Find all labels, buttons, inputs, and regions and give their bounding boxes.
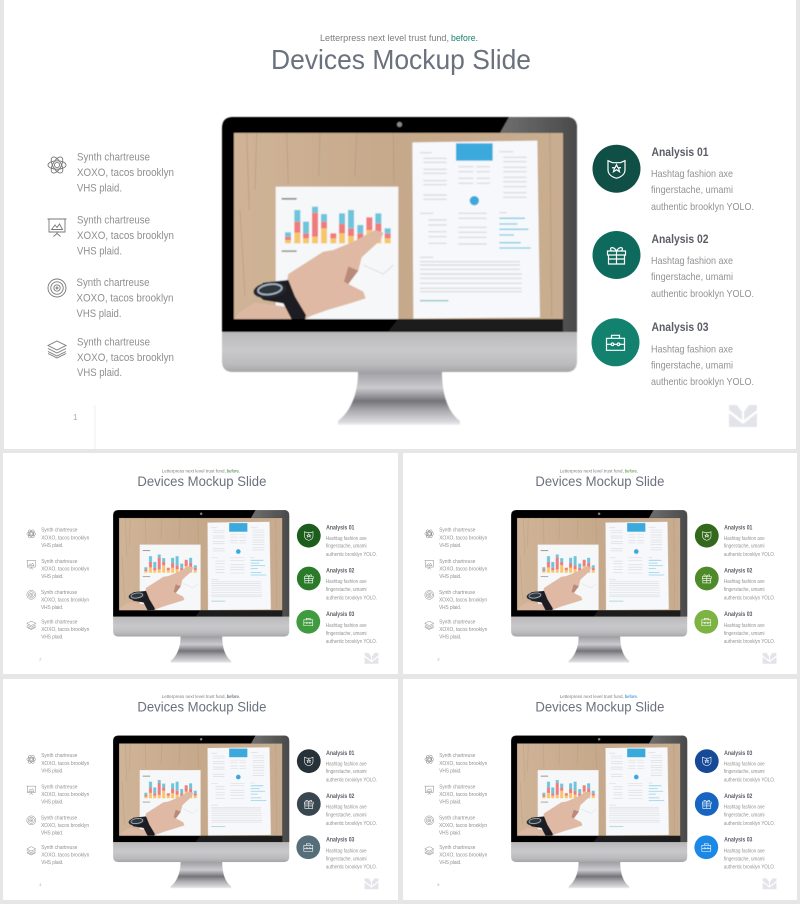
feature text 3: Synth chartreuse — [76, 277, 150, 289]
analysis 02: Hashtag fashion axe — [651, 255, 733, 267]
left feature list: VHS plaid. — [439, 543, 462, 549]
left feature list — [48, 152, 174, 379]
analysis list: authentic brooklyn YOLO. — [326, 552, 377, 558]
left feature list: Synth chartreuse — [439, 784, 475, 790]
left feature list: Synth chartreuse — [41, 753, 77, 759]
analysis list: fingerstache, umami — [724, 544, 765, 550]
left feature list: Synth chartreuse — [439, 619, 475, 625]
left feature list: VHS plaid. — [41, 634, 64, 640]
left feature list: Synth chartreuse — [41, 528, 77, 534]
feature text 4: VHS plaid. — [77, 367, 122, 379]
analysis list: authentic brooklyn YOLO. — [326, 639, 377, 645]
subtitle: before. — [451, 33, 478, 44]
left feature list: XOXO, tacos brooklyn — [41, 535, 89, 541]
panel: slide 5 blue — [403, 679, 797, 900]
left feature list: XOXO, tacos brooklyn — [41, 823, 89, 829]
left feature list — [425, 528, 487, 640]
feature text 1: Synth chartreuse — [77, 152, 150, 164]
left feature list — [27, 528, 89, 640]
left feature list: XOXO, tacos brooklyn — [41, 761, 89, 767]
left feature list: XOXO, tacos brooklyn — [41, 627, 89, 633]
analysis list: authentic brooklyn YOLO. — [724, 639, 775, 645]
analysis list: fingerstache, umami — [724, 812, 765, 818]
left feature list: VHS plaid. — [41, 860, 64, 866]
left feature list: XOXO, tacos brooklyn — [41, 853, 89, 859]
analysis list: Analysis 02 — [724, 569, 753, 575]
analysis 02: authentic brooklyn YOLO. — [651, 288, 754, 300]
analysis 01: authentic brooklyn YOLO. — [651, 201, 754, 213]
left feature list: XOXO, tacos brooklyn — [439, 792, 487, 798]
analysis 03: authentic brooklyn YOLO. — [651, 376, 754, 388]
analysis list: Analysis 01 — [326, 525, 355, 531]
page number: 1 — [73, 413, 78, 422]
left feature list: VHS plaid. — [439, 574, 462, 580]
circle icon: briefcase — [592, 318, 640, 366]
analysis list: authentic brooklyn YOLO. — [724, 864, 775, 870]
analysis list: Analysis 03 — [326, 612, 355, 618]
analysis list: Analysis 03 — [326, 838, 355, 844]
analysis list: fingerstache, umami — [326, 769, 367, 775]
logo watermark — [763, 878, 776, 889]
monitor mockup — [113, 510, 289, 663]
circle icon: shield — [592, 145, 640, 193]
left feature list: Synth chartreuse — [439, 590, 475, 596]
left feature list: VHS plaid. — [41, 605, 64, 611]
analysis list: Hashtag fashion axe — [724, 761, 765, 767]
left feature list: Synth chartreuse — [439, 753, 475, 759]
analysis list: fingerstache, umami — [326, 631, 367, 637]
left feature list: VHS plaid. — [439, 768, 462, 774]
left feature list: Synth chartreuse — [439, 528, 475, 534]
analysis list: authentic brooklyn YOLO. — [326, 778, 377, 784]
left feature list: Synth chartreuse — [41, 845, 77, 851]
analysis list: authentic brooklyn YOLO. — [724, 595, 775, 601]
analysis list: authentic brooklyn YOLO. — [326, 864, 377, 870]
title: Devices Mockup Slide — [535, 699, 665, 715]
feature text 4: Synth chartreuse — [77, 336, 150, 348]
analysis list: fingerstache, umami — [326, 856, 367, 862]
analysis 02: Analysis 02 — [652, 232, 709, 246]
left feature list: VHS plaid. — [41, 768, 64, 774]
page number: 4 — [39, 882, 42, 887]
analysis list: authentic brooklyn YOLO. — [326, 595, 377, 601]
title: Devices Mockup Slide — [137, 699, 267, 715]
left feature list: XOXO, tacos brooklyn — [439, 823, 487, 829]
analysis list: Analysis 03 — [724, 612, 753, 618]
icon: layers — [48, 341, 66, 358]
logo watermark — [365, 878, 378, 889]
analysis list: fingerstache, umami — [724, 631, 765, 637]
analysis list: Hashtag fashion axe — [326, 804, 367, 810]
left feature list: XOXO, tacos brooklyn — [439, 598, 487, 604]
subtitle: before. — [625, 694, 638, 699]
page number: 2 — [39, 656, 41, 661]
page number: 3 — [437, 656, 440, 661]
monitor mockup — [222, 117, 577, 425]
analysis list: fingerstache, umami — [724, 769, 765, 775]
analysis list: Hashtag fashion axe — [724, 536, 765, 542]
panel: slide 4 slate — [3, 679, 398, 900]
analysis list: Hashtag fashion axe — [326, 536, 367, 542]
title: Devices Mockup Slide — [137, 473, 267, 489]
left feature list: VHS plaid. — [439, 634, 462, 640]
left feature list: XOXO, tacos brooklyn — [439, 761, 487, 767]
feature text 1: VHS plaid. — [77, 182, 122, 194]
subtitle: before. — [227, 468, 240, 473]
logo watermark — [365, 653, 378, 664]
analysis 01: Hashtag fashion axe — [651, 168, 733, 180]
left feature list: VHS plaid. — [41, 543, 64, 549]
logo watermark — [729, 405, 757, 427]
monitor mockup — [511, 736, 687, 888]
icon: target — [48, 279, 66, 297]
logo watermark — [763, 653, 776, 664]
analysis list: fingerstache, umami — [326, 812, 367, 818]
subtitle: before. — [625, 468, 638, 473]
analysis list: Analysis 01 — [326, 751, 355, 757]
left feature list: XOXO, tacos brooklyn — [41, 598, 89, 604]
analysis list: Hashtag fashion axe — [724, 848, 765, 854]
monitor mockup — [113, 736, 289, 888]
left feature list: XOXO, tacos brooklyn — [41, 567, 89, 573]
left feature list: XOXO, tacos brooklyn — [439, 535, 487, 541]
left feature list: Synth chartreuse — [439, 845, 475, 851]
analysis list — [694, 749, 775, 870]
analysis 01: fingerstache, umami — [651, 184, 733, 196]
left feature list: VHS plaid. — [439, 860, 462, 866]
left feature list: VHS plaid. — [41, 800, 64, 806]
feature text 2: VHS plaid. — [77, 246, 122, 258]
analysis list: Hashtag fashion axe — [326, 623, 367, 629]
monitor mockup — [511, 510, 687, 663]
analysis list: authentic brooklyn YOLO. — [326, 821, 377, 827]
analysis list: Analysis 02 — [326, 569, 355, 575]
left feature list: Synth chartreuse — [439, 815, 475, 821]
analysis list: Hashtag fashion axe — [724, 579, 765, 585]
analysis list: fingerstache, umami — [724, 856, 765, 862]
subtitle: Letterpress next level trust fund, — [560, 468, 624, 473]
analysis 03: Analysis 03 — [652, 320, 709, 334]
left feature list: XOXO, tacos brooklyn — [439, 627, 487, 633]
feature text 3: VHS plaid. — [76, 308, 122, 320]
left feature list: Synth chartreuse — [41, 590, 77, 596]
subtitle: Letterpress next level trust fund, — [162, 694, 226, 699]
analysis list: authentic brooklyn YOLO. — [724, 552, 775, 558]
left feature list: VHS plaid. — [41, 574, 64, 580]
analysis 03: Hashtag fashion axe — [651, 344, 733, 356]
analysis list: authentic brooklyn YOLO. — [724, 821, 775, 827]
analysis list — [296, 524, 377, 645]
feature text 2: XOXO, tacos brooklyn — [77, 230, 174, 242]
analysis list: authentic brooklyn YOLO. — [724, 778, 775, 784]
analysis list — [296, 749, 377, 870]
left feature list: VHS plaid. — [439, 800, 462, 806]
analysis list: Hashtag fashion axe — [326, 848, 367, 854]
left feature list: Synth chartreuse — [41, 815, 77, 821]
icon: presentation board — [48, 219, 66, 236]
page number: 5 — [437, 882, 440, 887]
analysis list: Hashtag fashion axe — [724, 623, 765, 629]
subtitle: before. — [227, 694, 240, 699]
left feature list — [27, 753, 89, 866]
subtitle: Letterpress next level trust fund, — [162, 468, 226, 473]
left feature list: Synth chartreuse — [41, 559, 77, 565]
analysis list: Analysis 02 — [724, 794, 753, 800]
left feature list: Synth chartreuse — [439, 559, 475, 565]
analysis 01 — [651, 145, 754, 213]
left feature list: Synth chartreuse — [41, 784, 77, 790]
icon: atom — [48, 155, 66, 175]
left feature list: VHS plaid. — [41, 831, 64, 837]
left feature list: VHS plaid. — [439, 831, 462, 837]
panel: main slide — [4, 0, 796, 449]
analysis list: Analysis 01 — [724, 525, 753, 531]
analysis list — [592, 145, 754, 388]
analysis 01: Analysis 01 — [652, 145, 709, 159]
feature text 1: XOXO, tacos brooklyn — [77, 167, 174, 179]
title: Devices Mockup Slide — [271, 44, 531, 75]
subtitle: Letterpress next level trust fund, — [320, 33, 449, 44]
panel: slide 3 lime green — [403, 453, 797, 674]
subtitle: Letterpress next level trust fund, — [560, 694, 624, 699]
analysis list: Analysis 03 — [724, 838, 753, 844]
left feature list: VHS plaid. — [439, 605, 462, 611]
left feature list: XOXO, tacos brooklyn — [439, 853, 487, 859]
analysis list: fingerstache, umami — [724, 587, 765, 593]
analysis list: Hashtag fashion axe — [724, 804, 765, 810]
analysis 02 — [651, 232, 754, 300]
left feature list: XOXO, tacos brooklyn — [439, 567, 487, 573]
left feature list — [425, 753, 487, 866]
analysis 03: fingerstache, umami — [651, 360, 733, 372]
analysis list: Hashtag fashion axe — [326, 761, 367, 767]
analysis 02: fingerstache, umami — [651, 271, 733, 283]
circle icon: gift — [592, 231, 640, 279]
analysis list: fingerstache, umami — [326, 587, 367, 593]
left feature list: XOXO, tacos brooklyn — [41, 792, 89, 798]
feature text 2: Synth chartreuse — [77, 214, 150, 226]
analysis 03 — [651, 320, 754, 388]
left feature list: Synth chartreuse — [41, 619, 77, 625]
title: Devices Mockup Slide — [535, 473, 665, 489]
analysis list: Analysis 03 — [724, 751, 753, 757]
analysis list: Hashtag fashion axe — [326, 579, 367, 585]
panel: slide 2 green — [3, 453, 398, 674]
analysis list: fingerstache, umami — [326, 544, 367, 550]
analysis list: Analysis 02 — [326, 794, 355, 800]
analysis list — [694, 524, 775, 645]
feature text 3: XOXO, tacos brooklyn — [76, 292, 174, 304]
feature text 4: XOXO, tacos brooklyn — [77, 352, 174, 364]
